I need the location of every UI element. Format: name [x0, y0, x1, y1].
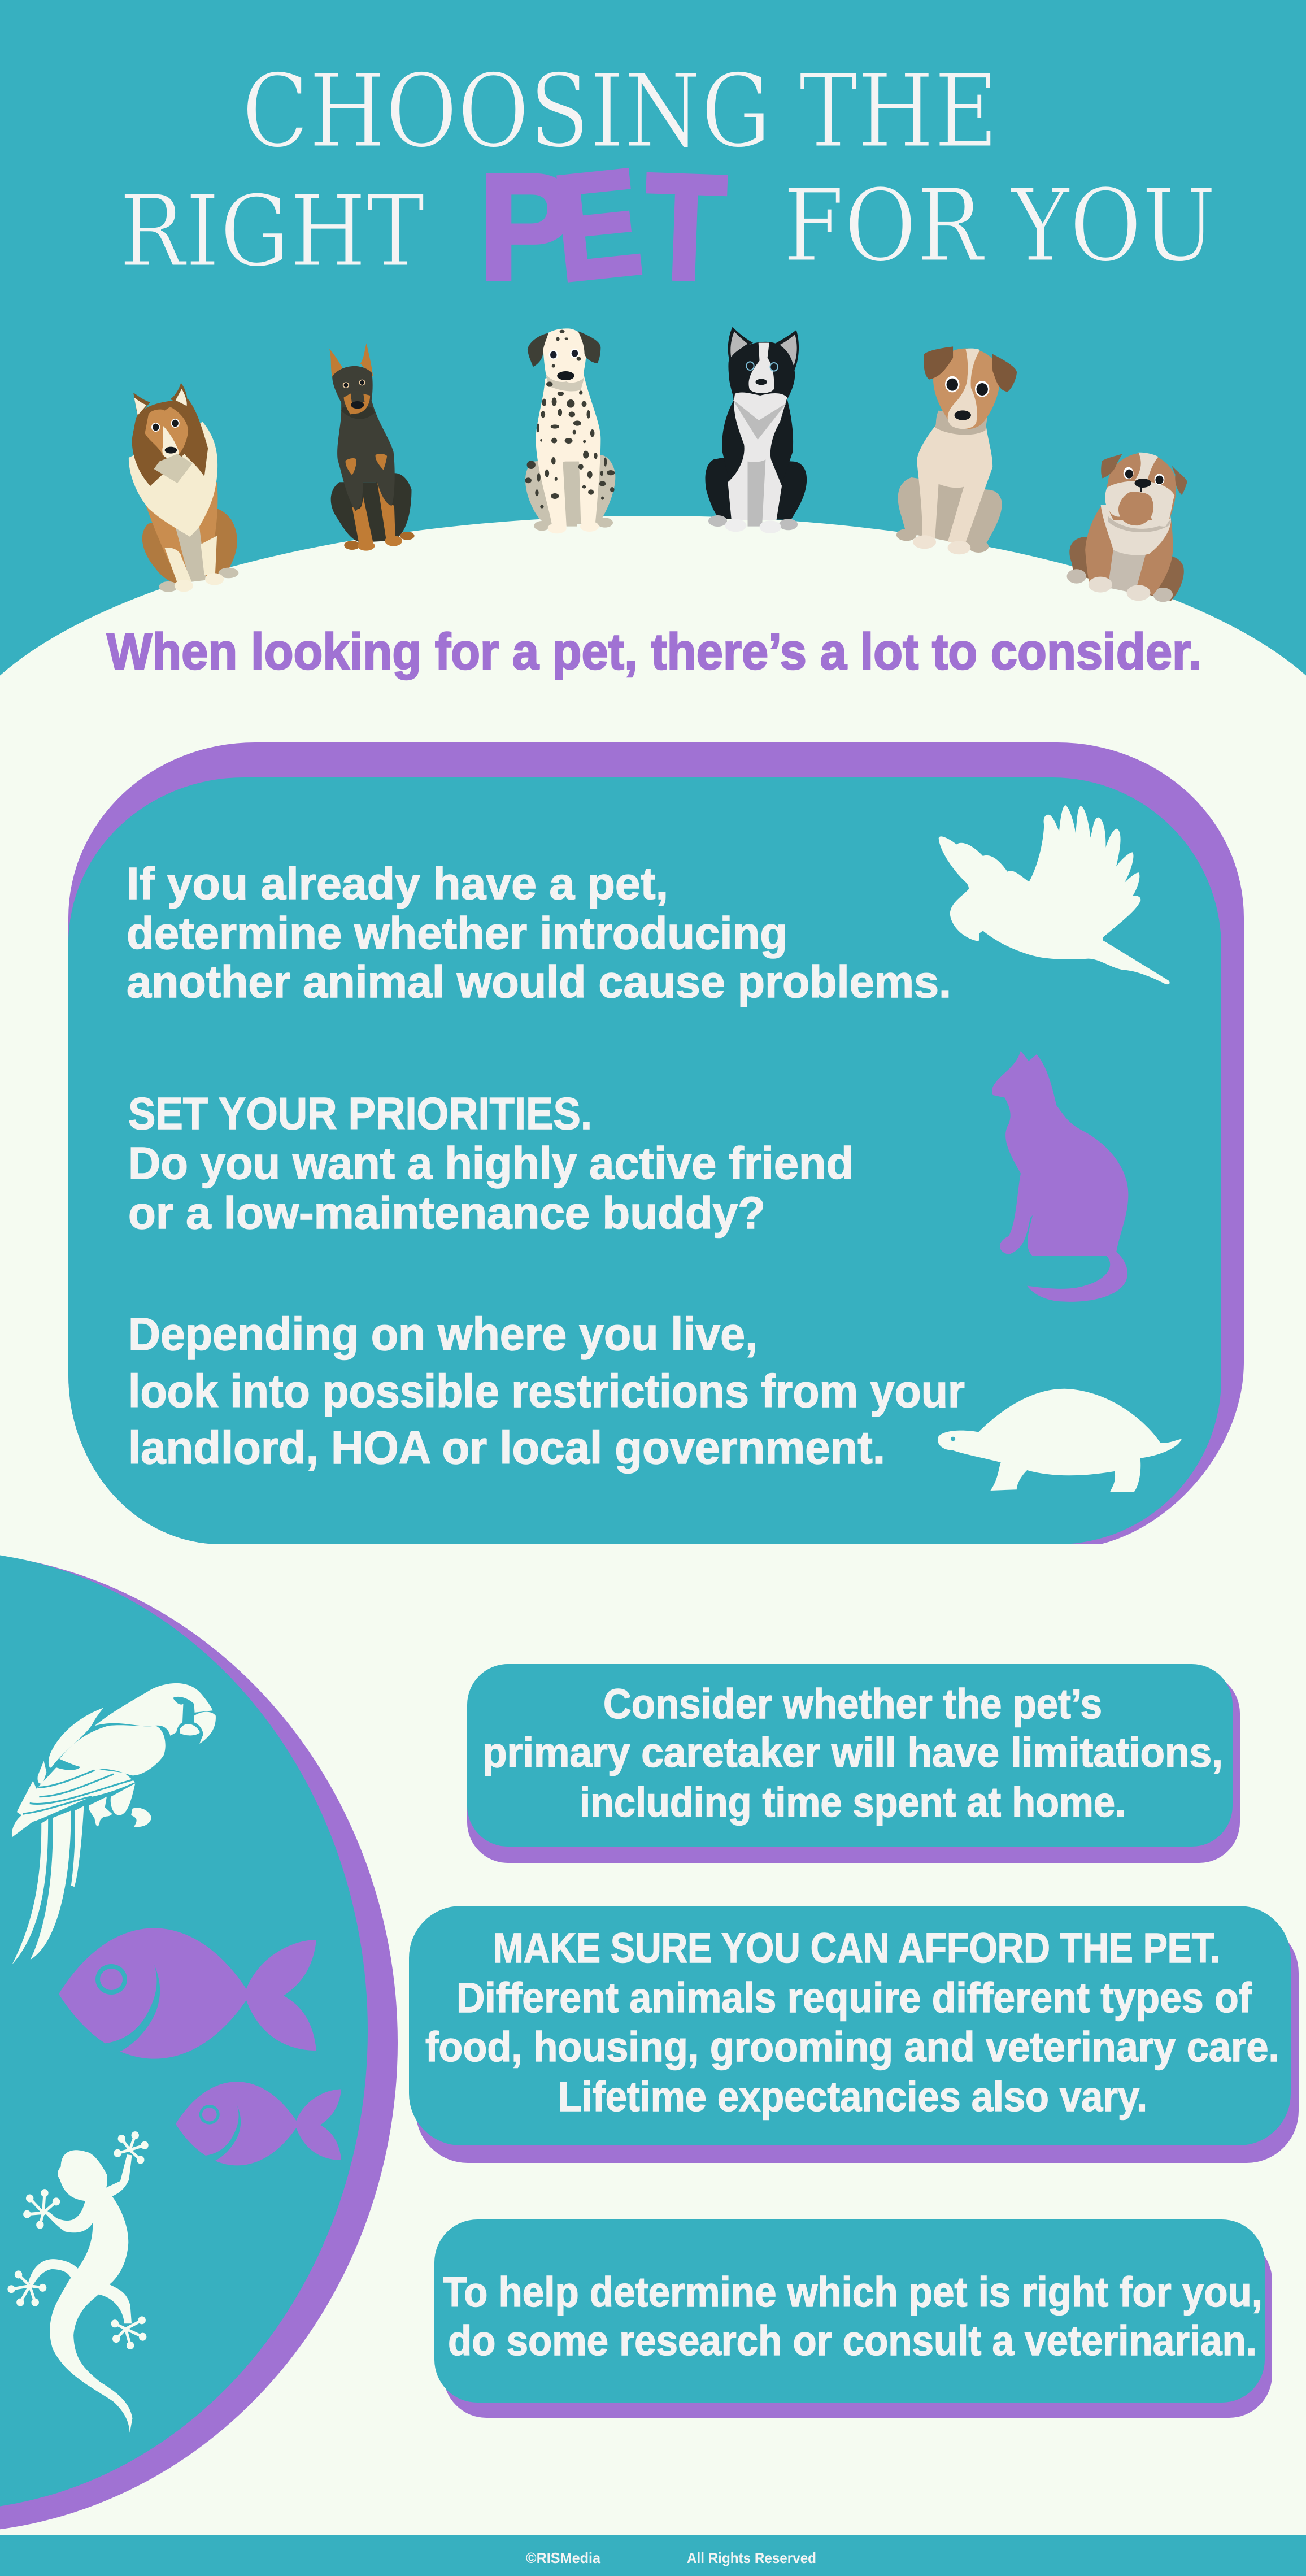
- text: existing pet: another animal would cause problems.: [127, 957, 951, 1007]
- icon: large fish: [59, 1928, 316, 2059]
- dog: collie: [129, 383, 238, 592]
- panel: research box: [434, 2219, 1272, 2418]
- icon: gecko: [7, 2131, 149, 2433]
- panel: caretaker box: [467, 1664, 1240, 1863]
- text: restrictions: landlord, HOA or local government.: [128, 1422, 885, 1474]
- icon: parrot: [12, 1683, 216, 1965]
- text: restrictions: [128, 1309, 965, 1474]
- footer: ©RISMedia: [526, 2549, 601, 2566]
- title: E: [547, 138, 648, 313]
- panel: afford box: [409, 1906, 1299, 2163]
- text: existing pet: If you already have a pet,: [127, 858, 668, 909]
- dogs row, right half: [705, 327, 1187, 602]
- text: restrictions: look into possible restrictions from your: [128, 1366, 965, 1417]
- panel: research box: do some research or consult a veterinarian.: [448, 2317, 1257, 2364]
- text: priorities: or a low-maintenance buddy?: [128, 1188, 765, 1238]
- icon: turtle: [938, 1389, 1182, 1492]
- panel: afford box: food, housing, grooming and veterinary care.: [425, 2023, 1279, 2070]
- dog: jack russell: [896, 346, 1017, 554]
- icon: small fish: [176, 2082, 341, 2165]
- title: RIGHT: [119, 175, 425, 289]
- footer: [0, 2535, 1306, 2576]
- title: T: [642, 142, 728, 312]
- dog: border collie: [705, 327, 807, 533]
- text: existing pet: [127, 858, 951, 1007]
- icon: cat: [992, 1050, 1128, 1302]
- title: P: [478, 144, 576, 311]
- panel: research box: To help determine which pet is right for you,: [443, 2269, 1263, 2316]
- dog: bulldog: [1067, 453, 1187, 602]
- panel: afford box: Lifetime expectancies also vary.: [558, 2073, 1147, 2120]
- dog: dalmatian: [525, 328, 615, 533]
- panel: caretaker box: including time spent at home.: [580, 1779, 1126, 1826]
- dogs row, left half: [129, 328, 615, 592]
- subtitle: When looking for a pet, there’s a lot to consider.: [107, 624, 1201, 680]
- panel: afford box: MAKE SURE YOU CAN AFFORD THE PET.: [493, 1925, 1220, 1971]
- text: priorities: [128, 1088, 854, 1238]
- dog: doberman: [329, 343, 415, 551]
- header background with dome: [0, 0, 1306, 1031]
- panel: caretaker box: Consider whether the pet’s: [603, 1680, 1102, 1727]
- text: priorities: SET YOUR PRIORITIES.: [128, 1088, 592, 1139]
- icon: bird: [939, 805, 1170, 984]
- title: CHOOSING THE: [242, 53, 998, 171]
- panel: animal circle: [0, 1551, 398, 2533]
- text: existing pet: determine whether introducing: [127, 908, 787, 958]
- title: [119, 53, 1216, 313]
- footer: All Rights Reserved: [687, 2549, 816, 2566]
- title: FOR YOU: [783, 167, 1216, 284]
- text: priorities: Do you want a highly active friend: [128, 1138, 854, 1188]
- panel: afford box: Different animals require different types of: [456, 1974, 1252, 2021]
- panel: considerations card: [68, 742, 1244, 1544]
- panel: caretaker box: primary caretaker will have limitations,: [482, 1729, 1223, 1776]
- text: restrictions: Depending on where you live,: [128, 1309, 758, 1360]
